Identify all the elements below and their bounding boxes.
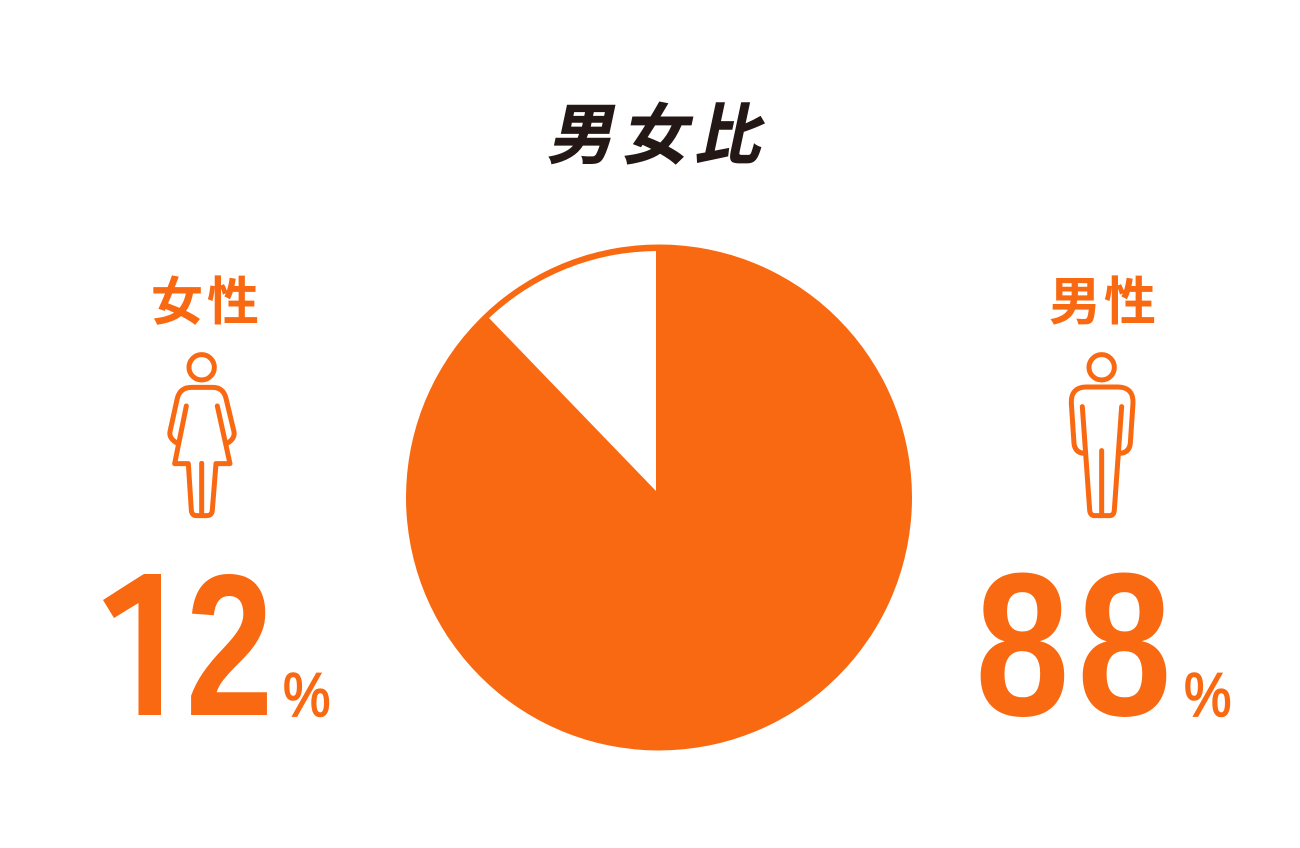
value: 12%: % <box>283 661 330 730</box>
value: 88%: 88 <box>975 530 1172 759</box>
pie chart <box>406 244 912 750</box>
value: 12%: 2 <box>186 533 273 758</box>
female panel <box>85 274 330 759</box>
title: 男女比 <box>544 100 772 173</box>
pie segment: female 12% <box>489 251 656 491</box>
label: female: 女性 <box>151 274 259 332</box>
male panel <box>975 274 1231 759</box>
value: 12% <box>85 532 330 759</box>
value: 88%: % <box>1184 661 1231 730</box>
icon: male figure <box>1071 355 1133 516</box>
icon: female figure <box>170 355 234 516</box>
label: male: 男性 <box>1049 274 1156 332</box>
value: 12%: 1 <box>96 532 194 759</box>
pie segment: male 88% <box>406 244 912 750</box>
